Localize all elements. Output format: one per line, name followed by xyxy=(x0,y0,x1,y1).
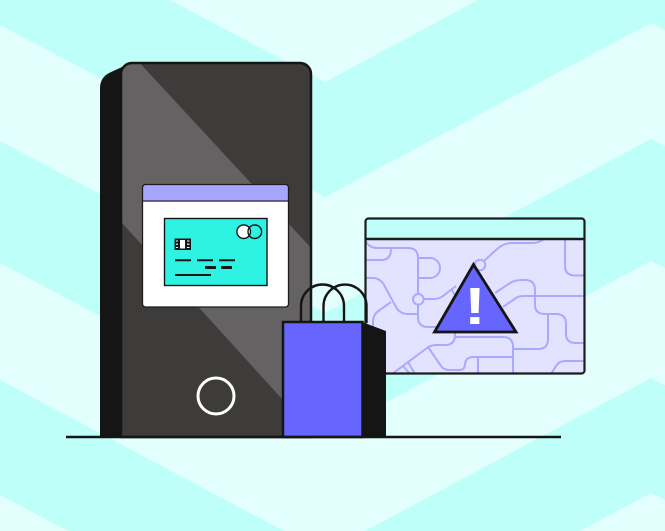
card chip xyxy=(174,238,191,250)
window header xyxy=(366,219,584,239)
bag front xyxy=(283,322,362,437)
terminal front face xyxy=(120,60,312,437)
credit card xyxy=(164,218,267,286)
shopping bag xyxy=(283,284,386,437)
card network logo xyxy=(237,225,262,238)
window body xyxy=(366,239,584,373)
ground line xyxy=(66,436,561,438)
network map lines xyxy=(366,239,585,374)
bag side xyxy=(362,322,386,437)
terminal round button xyxy=(198,378,234,414)
terminal screen xyxy=(142,184,288,307)
terminal side face xyxy=(100,67,122,437)
exclamation mark: ! xyxy=(464,278,486,335)
payment terminal xyxy=(100,60,312,437)
bag handles xyxy=(301,284,366,323)
warning triangle xyxy=(434,264,516,335)
card number lines xyxy=(175,260,235,275)
window frame xyxy=(366,218,584,374)
warning browser window xyxy=(366,218,585,374)
